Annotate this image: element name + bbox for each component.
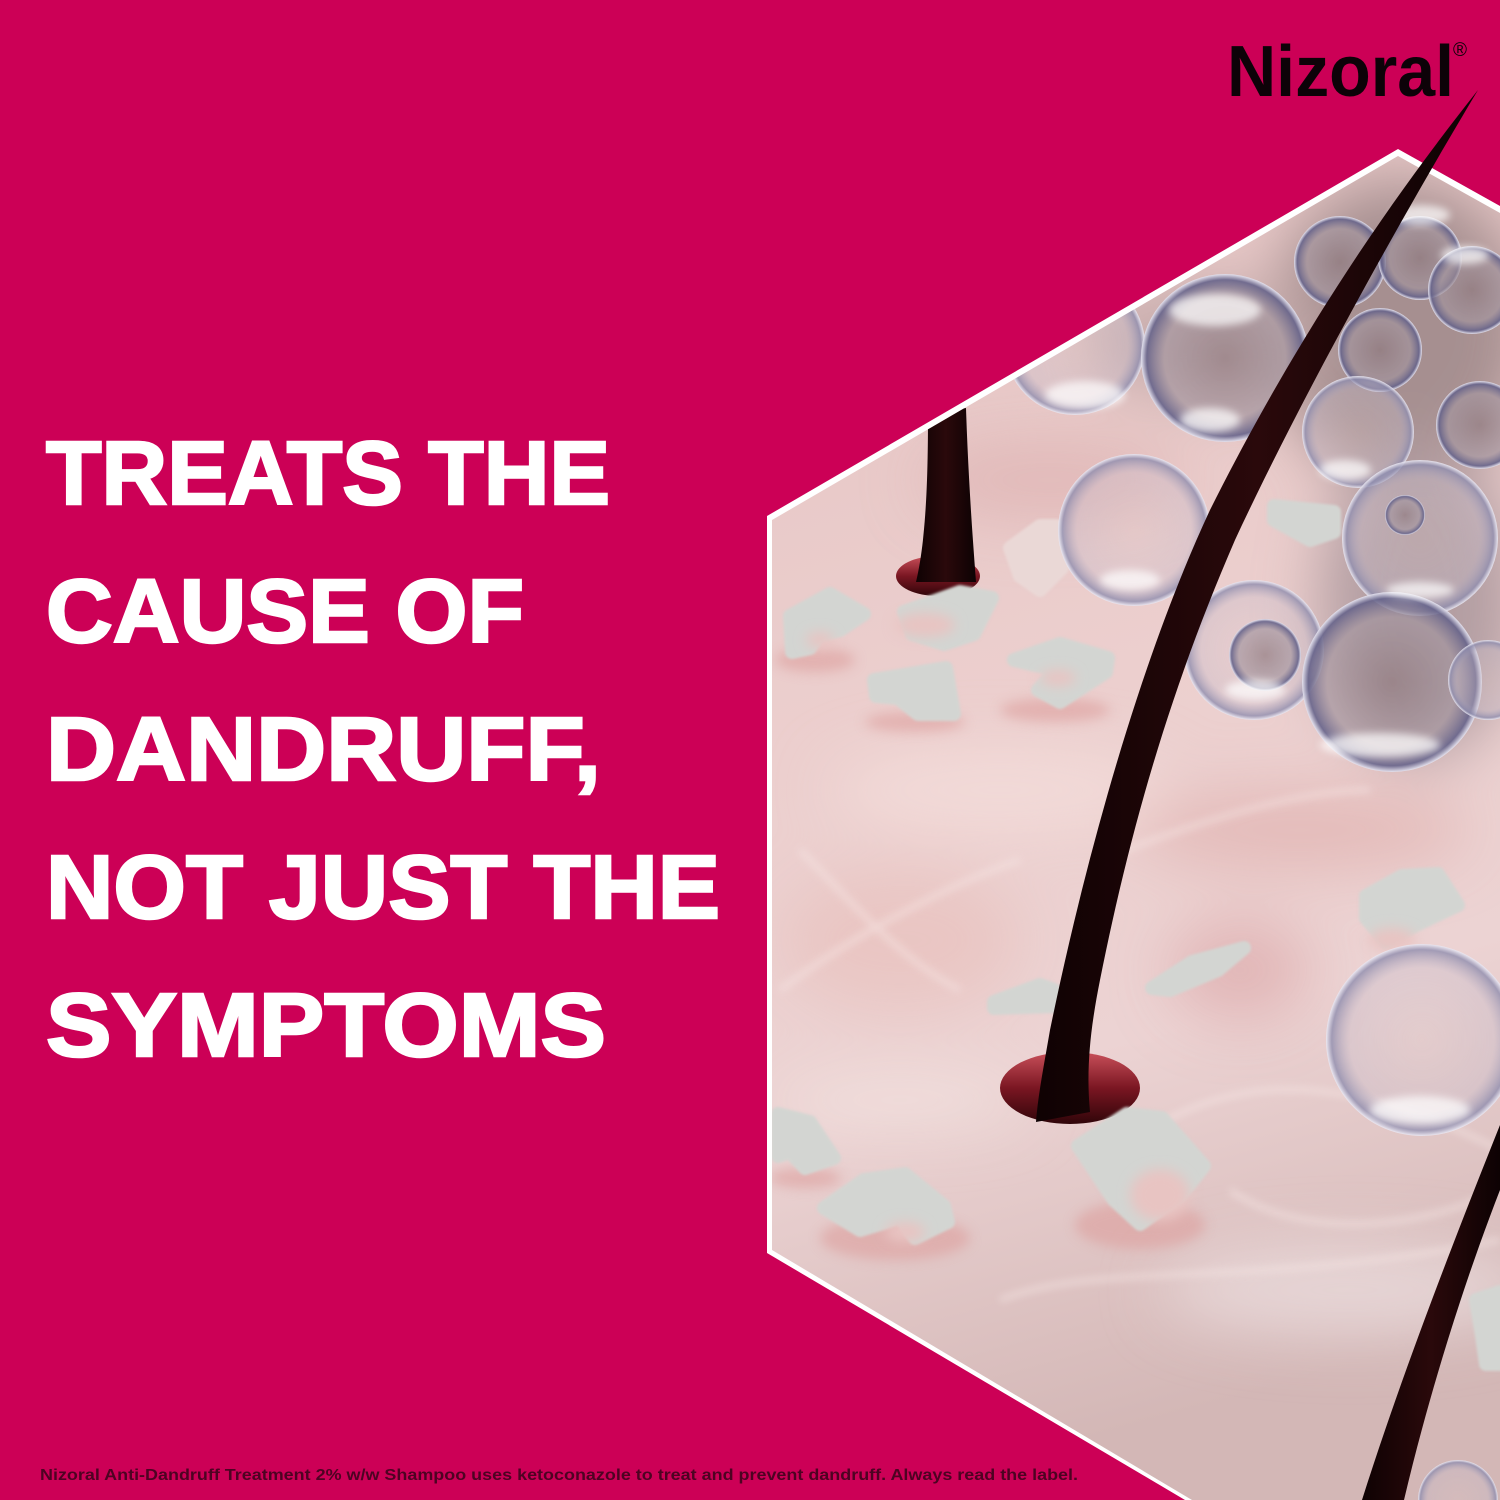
bubble highlights — [1045, 205, 1489, 1124]
dandruff flakes — [778, 506, 1500, 1364]
flake pink creases — [806, 613, 1416, 1242]
flake contact shadows — [769, 648, 1205, 1260]
follicle holes — [896, 556, 1140, 1124]
headline — [46, 424, 720, 1076]
main hair strand — [1036, 90, 1478, 1122]
skin and scalp illustration — [760, 140, 1500, 1500]
headline: TREATS THE — [46, 424, 610, 524]
headline: DANDRUFF, — [46, 700, 601, 800]
Nizoral logo: Nizoral — [1227, 32, 1454, 112]
hexagon image panel — [760, 140, 1500, 1500]
lower right hair — [1362, 1125, 1500, 1500]
short hair — [916, 408, 976, 582]
footnote: Nizoral Anti-Dandruff Treatment 2% w/w Shampoo uses ketoconazole to treat and prevent dandruff. Always read the label. — [40, 1467, 1078, 1484]
headline: CAUSE OF — [46, 562, 524, 662]
hexagon white border — [767, 149, 1500, 1500]
headline: SYMPTOMS — [46, 976, 606, 1076]
Nizoral logo: ® — [1453, 40, 1467, 61]
water bubbles — [1005, 216, 1500, 1500]
headline: NOT JUST THE — [46, 838, 720, 938]
